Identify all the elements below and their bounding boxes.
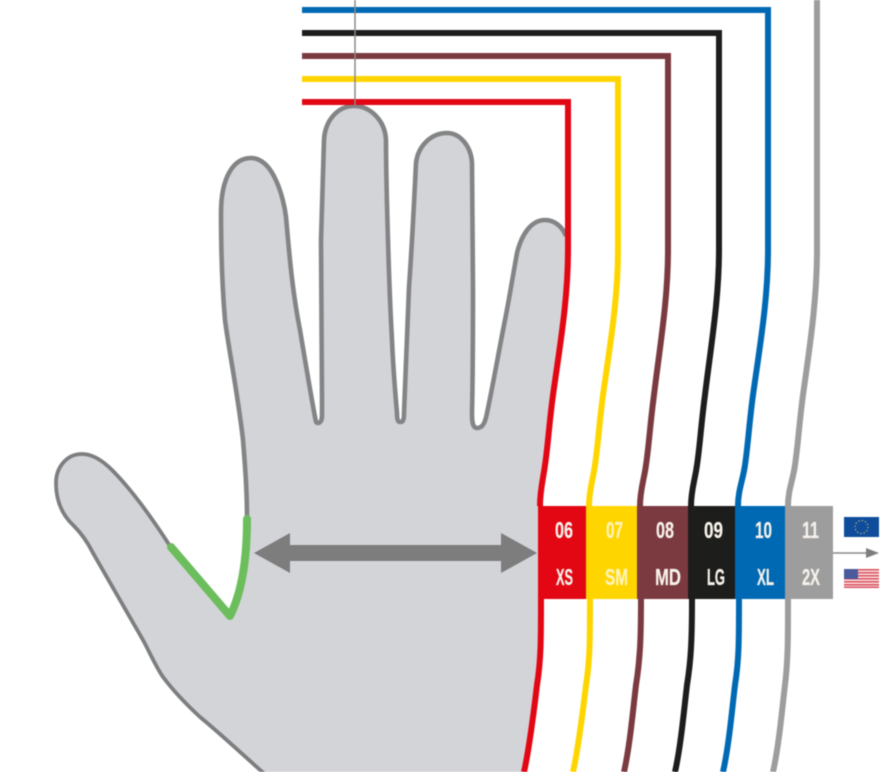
size 2X column xyxy=(785,506,833,599)
size LG column: LG xyxy=(707,564,725,590)
middle finger height line xyxy=(354,0,356,105)
size XL column: XL xyxy=(757,564,774,590)
size XL column: 10 xyxy=(755,517,772,543)
size line: SM yellow xyxy=(302,79,618,772)
size line: 2X grey xyxy=(773,0,817,772)
size MD column: 08 xyxy=(656,517,674,543)
size SM column: 07 xyxy=(606,517,623,543)
hand xyxy=(56,106,568,772)
size line: LG black xyxy=(302,33,719,772)
size MD column: MD xyxy=(655,564,681,590)
size LG column xyxy=(688,506,735,599)
fingers outline xyxy=(221,106,566,518)
size 2X column: 2X xyxy=(802,564,820,590)
green thumb crotch highlight xyxy=(171,519,247,616)
size SM column xyxy=(586,506,637,599)
size table xyxy=(538,506,833,599)
size MD column xyxy=(637,506,688,599)
size 2X column: 11 xyxy=(802,517,819,543)
size XS column: XS xyxy=(556,564,573,590)
arrow: table to flags xyxy=(833,548,879,558)
size LG column: 09 xyxy=(704,517,723,543)
thumb outline xyxy=(56,454,268,772)
size SM column: SM xyxy=(605,564,628,590)
size line: XL blue xyxy=(302,10,768,772)
hand silhouette fill xyxy=(56,106,568,772)
size line: XS red xyxy=(302,102,568,772)
size line: MD maroon xyxy=(302,56,668,772)
size XS column xyxy=(538,506,586,599)
icon: EU flag xyxy=(844,517,879,537)
size XS column: 06 xyxy=(555,517,573,543)
hand width double arrow xyxy=(254,533,537,573)
size XL column xyxy=(735,506,785,599)
icon: US flag xyxy=(844,569,879,588)
